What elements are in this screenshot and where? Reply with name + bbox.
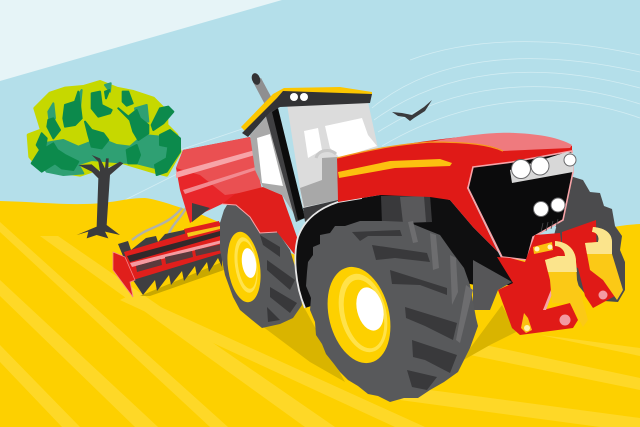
step block (381, 195, 432, 224)
tree trunk (77, 155, 123, 238)
roof yellow (241, 87, 372, 132)
hood side (337, 136, 572, 252)
tree crown light (28, 82, 180, 175)
headlights (512, 154, 576, 216)
front tyre (306, 221, 478, 402)
tree crown dark patches (32, 90, 180, 175)
exhaust (250, 72, 273, 110)
harrow shadow strip (140, 262, 224, 296)
field (0, 198, 640, 427)
yellow stripe (338, 159, 452, 178)
front linkage (497, 220, 623, 335)
grille slits (541, 219, 558, 232)
harrow top beam (184, 221, 220, 236)
rear fender (222, 187, 298, 255)
yellow hook 2 (585, 227, 623, 300)
front hub (352, 285, 388, 333)
front lights (533, 242, 553, 254)
front tread grooves (352, 230, 457, 390)
front wheel arch (295, 195, 515, 308)
front chassis (473, 260, 512, 310)
hoses (132, 208, 186, 240)
tree (28, 82, 180, 238)
light band (510, 152, 573, 183)
roof black (242, 91, 372, 137)
tractor (113, 72, 625, 402)
side window (250, 110, 298, 220)
rear tank (176, 137, 262, 223)
cab pillar (265, 108, 305, 222)
front weight red (497, 233, 578, 335)
bird (392, 100, 432, 121)
hood top (430, 133, 572, 151)
windscreen (287, 102, 378, 208)
harrow tines (118, 222, 222, 295)
field stripes (0, 222, 640, 427)
harrow end plate (113, 252, 135, 297)
cab lower panel (303, 200, 338, 222)
front tread lugs (408, 221, 473, 343)
roof lights (290, 93, 298, 101)
front bracket back (562, 220, 615, 308)
wind lines (125, 42, 640, 200)
rear wheel (220, 200, 302, 328)
front rim (318, 260, 400, 370)
hood (337, 133, 576, 260)
ground shadow (262, 300, 516, 382)
grille (468, 151, 573, 260)
yellow hook 1 (545, 241, 588, 327)
tree crown mid green (38, 135, 170, 175)
rear tread (260, 235, 297, 322)
harrow frame (124, 223, 222, 280)
tree crown upper mid patches (48, 83, 148, 125)
far front wheel (550, 176, 625, 302)
rear tyre (220, 200, 302, 328)
cab (241, 72, 378, 222)
front wheel (306, 221, 478, 402)
harrow attachment (113, 221, 224, 297)
rear rim (223, 230, 265, 304)
hood highlight line (337, 142, 503, 158)
